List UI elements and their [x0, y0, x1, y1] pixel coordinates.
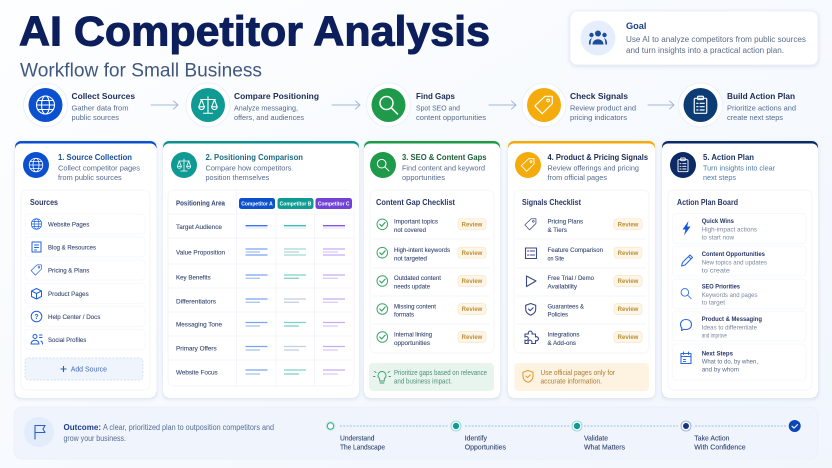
step: find gaps: content opportunities: [416, 113, 486, 122]
action plan board: Action Plan Board: [677, 198, 738, 207]
source: pricing and plans: Pricing & Plans: [48, 268, 90, 274]
goal text: [626, 21, 806, 55]
comparison table: [168, 190, 354, 386]
item: outdated content: needs update: [394, 284, 430, 290]
milestone: understand: [326, 421, 385, 452]
item: guarantees: [526, 304, 642, 318]
sources list: Sources: [30, 198, 58, 207]
title: AI Competitor Analysis: [19, 8, 490, 54]
item: missing formats: Missing content: [394, 304, 436, 310]
source: help center: Help Center / Docs: [48, 314, 101, 321]
milestone: validate: Validate: [584, 436, 608, 442]
item: product and messaging: [672, 311, 806, 341]
source: blog and resources: Blog & Resources: [48, 244, 97, 252]
table header: Positioning Area: [176, 198, 226, 208]
checklist: Content Gap Checklist: [376, 198, 455, 207]
item: internal linking: Internal linking: [394, 332, 432, 338]
item: quick wins: [672, 214, 806, 243]
checklist: [370, 190, 494, 353]
milestone: take action: Take Action: [694, 436, 730, 442]
sources list: [21, 190, 150, 390]
source: pricing and plans: [25, 260, 145, 280]
step: collect sources: public sources: [72, 113, 119, 122]
source: help center: [25, 306, 145, 326]
outcome text: A clear, prioritized plan to outposition competitors and: [103, 423, 274, 432]
milestone: take action: [681, 421, 746, 452]
source: social profiles: [25, 330, 145, 350]
item: seo priorities: [672, 279, 806, 308]
item: internal linking: [377, 332, 486, 347]
panel: product and pricing signals: [508, 141, 655, 398]
milestone: identify: [451, 421, 506, 452]
milestone: understand: Understand: [340, 436, 375, 442]
panel: seo and content gaps: [364, 141, 500, 398]
arrow: [151, 101, 178, 109]
step: collect sources: Gather data from: [72, 104, 128, 112]
description: Turn insights into clear: [703, 164, 776, 172]
item: topics: [377, 218, 486, 234]
item: topics: Important topics: [394, 218, 439, 226]
row labels: Website Focus: [176, 370, 218, 376]
step: find gaps: Spot SEO and: [416, 104, 460, 112]
description: [206, 164, 292, 182]
item: content opportunities: New topics and updates: [702, 259, 768, 266]
table header: Competitor A: [241, 202, 273, 208]
item: feature comparison: on Site: [548, 256, 564, 262]
item: free trial: Free Trial / Demo: [548, 275, 594, 282]
heading: 2. Positioning Comparison: [206, 152, 303, 162]
item: content opportunities: Content Opportunities: [702, 251, 765, 258]
icon: clipboard: [670, 152, 696, 178]
step: find gaps: Find Gaps: [416, 91, 455, 101]
item: pricing plans: Review: [618, 222, 639, 228]
item: missing formats: [377, 304, 486, 318]
step: collect sources: Collect Sources: [72, 91, 135, 101]
callout: official pages: Use official pages only for: [540, 370, 616, 377]
step: check signals: Review product and: [570, 104, 636, 112]
table header: [176, 198, 352, 209]
milestone: validate: [572, 421, 625, 452]
milestone: take action: With Confidence: [694, 444, 746, 452]
description: Collect competitor pages: [58, 164, 140, 172]
row labels: Key Benefits: [176, 274, 211, 282]
source: help center: ?: [34, 314, 39, 321]
item: feature comparison: [526, 247, 642, 262]
item: guarantees: Policies: [548, 312, 569, 318]
step: check signals: Check Signals: [570, 91, 628, 101]
checklist: Signals Checklist: [522, 198, 581, 207]
outcome band: [14, 407, 818, 459]
source: product pages: Product Pages: [48, 291, 89, 298]
item: feature comparison: Feature Comparison: [548, 247, 603, 254]
description: from official pages: [548, 173, 607, 182]
item: integrations: Review: [618, 335, 639, 341]
item: next steps: and by whom: [702, 366, 739, 374]
source: website pages: Website Pages: [48, 222, 90, 228]
table header: Competitor C: [318, 202, 350, 208]
icon: team: [580, 20, 616, 56]
placeholder lines: competitor a: [246, 226, 268, 374]
timeline: [326, 420, 801, 452]
callout: official pages: accurate information.: [540, 378, 602, 386]
item: keywords: not targeted: [394, 256, 427, 262]
action plan board: [668, 190, 812, 390]
item: feature comparison: Review: [618, 251, 639, 257]
item: quick wins: to start now: [702, 235, 734, 242]
milestone: done check: [789, 420, 801, 432]
item: pricing plans: Pricing Plans: [548, 218, 584, 226]
item: outdated content: Outdated content: [394, 275, 441, 282]
description: [402, 164, 485, 182]
heading: 1. Source Collection: [58, 152, 132, 162]
description: position themselves: [206, 173, 270, 182]
step: compare positioning: [186, 83, 319, 127]
step: collect sources: [24, 83, 135, 127]
outcome text: [64, 422, 274, 443]
workflow steps: [24, 83, 796, 127]
description: from public sources: [58, 173, 122, 182]
item: seo priorities: SEO Priorities: [702, 284, 740, 290]
row labels: Value Proposition: [176, 250, 225, 256]
goal text: Use AI to analyze competitors from public sources: [626, 35, 806, 44]
description: Find content and keyword: [402, 164, 485, 172]
step: find gaps: [366, 83, 486, 127]
step: check signals: pricing indicators: [570, 113, 627, 122]
arrow: [489, 101, 516, 109]
row labels: [176, 224, 225, 376]
placeholder lines: competitor b: [284, 226, 306, 374]
item: free trial: Review: [618, 279, 639, 285]
item: keywords: [377, 247, 486, 262]
icon: magnifier: [370, 152, 396, 178]
row labels: Target Audience: [176, 224, 222, 231]
item: product and messaging: and improve: [702, 332, 727, 339]
heading: 3. SEO & Content Gaps: [402, 152, 487, 162]
step: compare positioning: Compare Positioning: [234, 91, 319, 101]
source: social profiles: Social Profiles: [48, 337, 87, 344]
item: missing formats: formats: [394, 312, 415, 318]
item: outdated content: [377, 275, 486, 290]
milestone: identify: Opportunities: [465, 444, 506, 452]
description: next steps: [703, 173, 736, 182]
step: build action plan: Prioritize actions and: [727, 104, 796, 112]
placeholder lines: competitor c: [323, 226, 345, 374]
row labels: Differentiators: [176, 298, 217, 306]
add source button: Add Source: [71, 364, 107, 374]
item: internal linking: opportunities: [394, 340, 431, 347]
step: build action plan: [678, 83, 796, 127]
item: topics: not covered: [394, 227, 426, 234]
row labels: Messaging Tone: [176, 322, 222, 328]
item: quick wins: Quick Wins: [702, 218, 734, 225]
step: build action plan: Build Action Plan: [727, 91, 795, 101]
item: content opportunities: to create: [702, 267, 730, 274]
description: Compare how competitors: [206, 164, 292, 172]
icon: scale: [171, 152, 197, 178]
subtitle: Workflow for Small Business: [20, 60, 262, 82]
table header: Competitor B: [280, 202, 312, 208]
callout: prioritize gaps: and business impact.: [394, 378, 452, 386]
item: internal linking: Review: [462, 335, 483, 341]
item: integrations: [525, 331, 642, 347]
milestone: understand: The Landscape: [340, 444, 385, 452]
item: topics: Review: [462, 222, 483, 228]
row labels: Primary Offers: [176, 346, 217, 352]
item: free trial: Availability: [548, 284, 578, 290]
description: Review offerings and pricing: [548, 164, 639, 172]
source: blog and resources: [25, 237, 145, 257]
description: [548, 164, 639, 182]
description: [58, 164, 140, 182]
item: pricing plans: [525, 218, 642, 234]
arrow: [332, 101, 360, 109]
milestone: validate: What Matters: [584, 444, 625, 452]
item: next steps: [672, 344, 806, 380]
item: seo priorities: to target: [702, 300, 725, 306]
item: guarantees: Review: [618, 307, 639, 313]
panel: source collection: [15, 141, 156, 398]
step: build action plan: create next steps: [727, 113, 783, 122]
goal text: and turn insights into a practical action plan.: [626, 46, 784, 55]
callout: prioritize gaps: [369, 363, 494, 391]
step: compare positioning: offers, and audiences: [234, 113, 304, 122]
outcome text: grow your business.: [64, 434, 126, 443]
item: integrations: & Add-ons: [548, 340, 577, 347]
outcome text: Outcome:: [64, 422, 101, 432]
heading: 4. Product & Pricing Signals: [548, 152, 648, 162]
item: keywords: Review: [462, 251, 483, 257]
item: guarantees: Guarantees &: [548, 304, 584, 310]
item: next steps: Next Steps: [702, 350, 733, 358]
heading: 5. Action Plan: [703, 152, 754, 162]
milestone: identify: Identify: [465, 436, 487, 442]
callout: official pages: [514, 363, 649, 391]
checklist: [514, 190, 649, 353]
item: pricing plans: & Tiers: [548, 227, 568, 234]
icon: tag: [515, 152, 541, 178]
item: keywords: High-intent keywords: [394, 247, 451, 254]
item: free trial: [526, 275, 642, 290]
item: missing formats: Review: [462, 307, 483, 313]
item: outdated content: Review: [462, 279, 483, 285]
icon: flag: [24, 417, 54, 447]
item: product and messaging: Ideas to differentiate: [702, 324, 757, 331]
goal card: [570, 11, 818, 65]
item: product and messaging: Product & Messaging: [702, 316, 762, 323]
panel: positioning comparison: [163, 141, 359, 398]
panel: action plan: [662, 141, 818, 398]
step: compare positioning: Analyze messaging,: [234, 104, 298, 112]
arrow: [648, 101, 674, 109]
item: seo priorities: Keywords and pages: [702, 292, 758, 299]
item: integrations: Integrations: [548, 332, 580, 338]
icon: globe: [23, 152, 49, 178]
step: check signals: [522, 83, 636, 127]
item: content opportunities: [672, 246, 806, 276]
source: product pages: [25, 284, 145, 304]
description: opportunities: [402, 173, 445, 182]
goal text: Goal: [626, 21, 646, 31]
add source button: [25, 358, 143, 380]
callout: prioritize gaps: Prioritize gaps based on relevance: [394, 370, 487, 377]
description: [703, 164, 776, 182]
source: website pages: [25, 214, 145, 234]
item: quick wins: High-impact actions: [702, 227, 758, 234]
item: next steps: What to do, by when,: [702, 358, 758, 366]
